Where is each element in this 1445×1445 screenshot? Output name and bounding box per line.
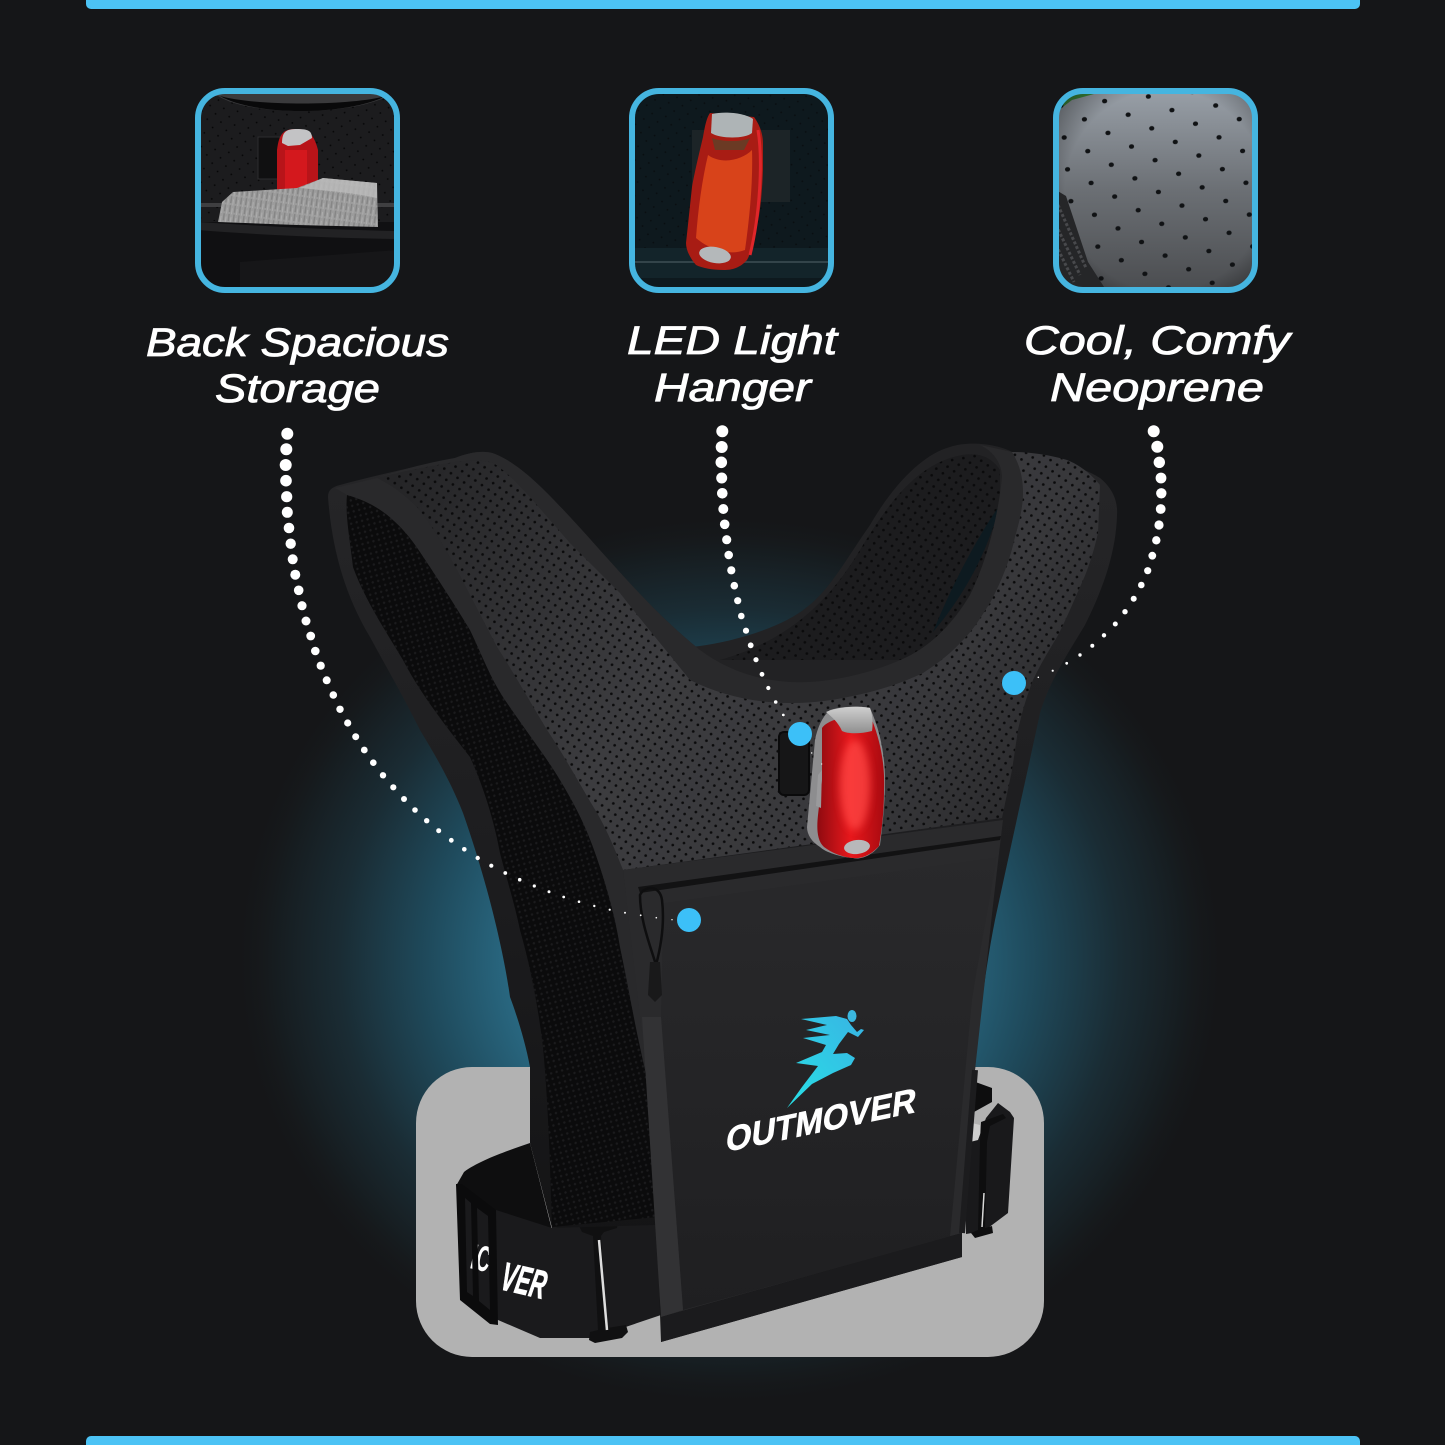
dotted leader: back storage xyxy=(280,428,673,920)
slider left xyxy=(579,1216,628,1343)
runner head xyxy=(848,1010,856,1022)
thumbnail: LED light xyxy=(632,91,831,290)
heading: Back Spacious Storage xyxy=(146,321,449,411)
gray base panel xyxy=(416,1067,1044,1357)
heading: LED Light Hanger: LED Light xyxy=(627,319,839,363)
marker: neoprene xyxy=(1002,671,1026,695)
belt upper clip right xyxy=(970,1080,992,1112)
marker: LED light xyxy=(788,722,812,746)
runner icon xyxy=(787,1016,864,1108)
buckle left xyxy=(456,1184,498,1325)
perforated front panel xyxy=(377,452,1100,870)
heading: Cool, Comfy Neoprene: Neoprene xyxy=(1050,366,1264,410)
belt reflection right xyxy=(972,1123,980,1143)
heading: Back Spacious Storage: Back Spacious xyxy=(146,321,449,365)
heading: Cool, Comfy Neoprene xyxy=(1024,319,1294,410)
top accent bar xyxy=(86,0,1360,9)
heading: LED Light Hanger xyxy=(627,319,839,410)
vest body silhouette xyxy=(328,445,1117,1342)
belt text clipped: IC xyxy=(467,1236,495,1280)
belt interior xyxy=(456,1143,552,1230)
dotted leader: neoprene xyxy=(1038,425,1167,678)
heading: Cool, Comfy Neoprene: Cool, Comfy xyxy=(1024,319,1294,363)
side binding strip xyxy=(335,478,661,1133)
bottom accent bar xyxy=(86,1436,1360,1445)
pocket xyxy=(623,820,1003,1342)
OUTMOVER wordmark: OUTMOVER xyxy=(724,1081,918,1160)
brand logo xyxy=(724,1010,918,1160)
running vest xyxy=(328,444,1117,1342)
teal glow xyxy=(230,510,1230,1410)
dark side mesh xyxy=(347,495,657,1227)
LED clip light xyxy=(807,707,885,858)
thumbnail: back storage xyxy=(198,91,397,290)
back strap xyxy=(690,444,1040,720)
marker: back storage xyxy=(677,908,701,932)
waist belt xyxy=(456,1080,1014,1343)
neck binding xyxy=(377,445,1023,703)
heading: LED Light Hanger: Hanger xyxy=(654,366,813,410)
zipper pull xyxy=(640,888,663,1002)
dotted leader: LED light xyxy=(716,425,822,765)
LED clip holder xyxy=(779,732,809,795)
belt band right xyxy=(966,1103,1014,1234)
belt text: VER xyxy=(497,1255,551,1308)
thumbnail: neoprene xyxy=(1056,91,1255,290)
slider right xyxy=(971,1114,1006,1238)
belt band left xyxy=(462,1190,661,1338)
heading: Back Spacious Storage: Storage xyxy=(215,367,380,411)
